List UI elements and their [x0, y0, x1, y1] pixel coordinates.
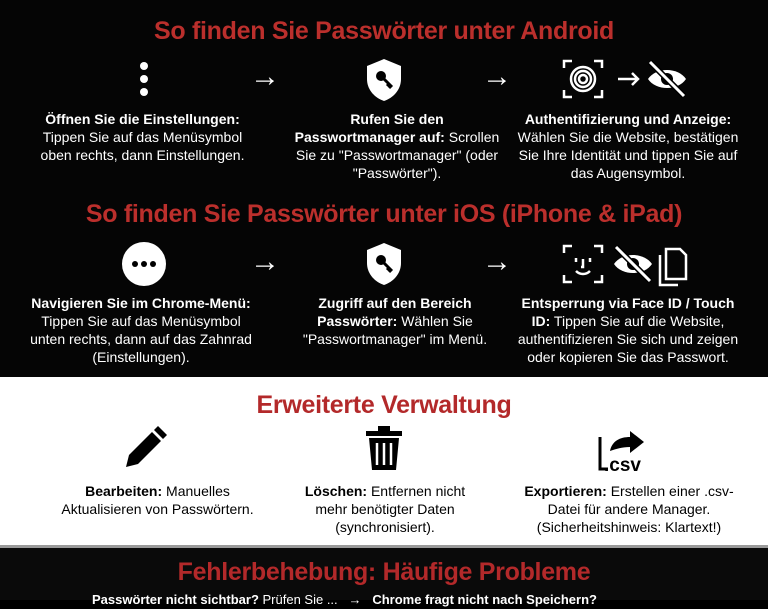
arrow: → [250, 245, 280, 278]
title: android: So finden Sie Passwörter unter Android [154, 17, 614, 45]
text: bearbeiten: Bearbeiten: Manuelles Aktualisieren von Passwörtern. [61, 483, 254, 517]
icon: ios menu [122, 242, 166, 286]
arrow: → [482, 60, 512, 93]
icon: shield key [367, 243, 401, 285]
icon: menu dots [140, 62, 148, 96]
icon: pencil [126, 426, 167, 467]
icon: faceid eye copy [562, 244, 688, 286]
title: ios: So finden Sie Passwörter unter iOS (iPhone & iPad) [86, 200, 682, 228]
text: step 2: Rufen Sie den Passwortmanager auf: Scrollen Sie zu "Passwortmanager" (oder "Passwörter"). [295, 111, 499, 181]
panel: erweiterte verwaltung [0, 377, 768, 545]
text: problems: Passwörter nicht sichtbar? Prüfen Sie ... → Chrome fragt nicht nach Speichern? [92, 592, 597, 607]
title: verwaltung: Erweiterte Verwaltung [257, 391, 511, 419]
title: fehlerbehebung: Fehlerbehebung: Häufige Probleme [178, 558, 590, 586]
text: ios step 2: Zugriff auf den Bereich Passwörter: Wählen Sie "Passwortmanager" im Menü. [303, 295, 487, 347]
panel: android [0, 0, 768, 377]
text: step 3: Authentifizierung und Anzeige: Wählen Sie die Website, bestätigen Sie Ihre Identität und tippen Sie auf das Augensymbol. [518, 111, 738, 181]
arrow: → [482, 245, 512, 278]
arrow: → [250, 60, 280, 93]
text: step 1: Öffnen Sie die Einstellungen: Tippen Sie auf das Menüsymbol oben rechts, dann Einstellungen. [41, 111, 244, 163]
text: ios step 1: Navigieren Sie im Chrome-Menü: Tippen Sie auf das Menüsymbol unten rechts, dann auf das Zahnrad (Einstellungen). [30, 295, 252, 365]
icon: csv export [598, 431, 644, 473]
text: exportieren: Exportieren: Erstellen einer .csv-Datei für andere Manager. (Sicherheitshinweis: Klartext!) [524, 483, 734, 535]
icon: shield key [367, 59, 401, 101]
icon: fingerprint eye [562, 60, 686, 98]
text: ios step 3: Entsperrung via Face ID / Touch ID: Tippen Sie auf die Website, authentifizieren Sie sich und zeigen oder kopieren Sie das Passwort. [518, 295, 738, 365]
text: loeschen: Löschen: Entfernen nicht mehr benötigter Daten (synchronisiert). [305, 483, 465, 535]
icon: trash [366, 426, 402, 470]
panel: fehlerbehebung [0, 548, 768, 600]
